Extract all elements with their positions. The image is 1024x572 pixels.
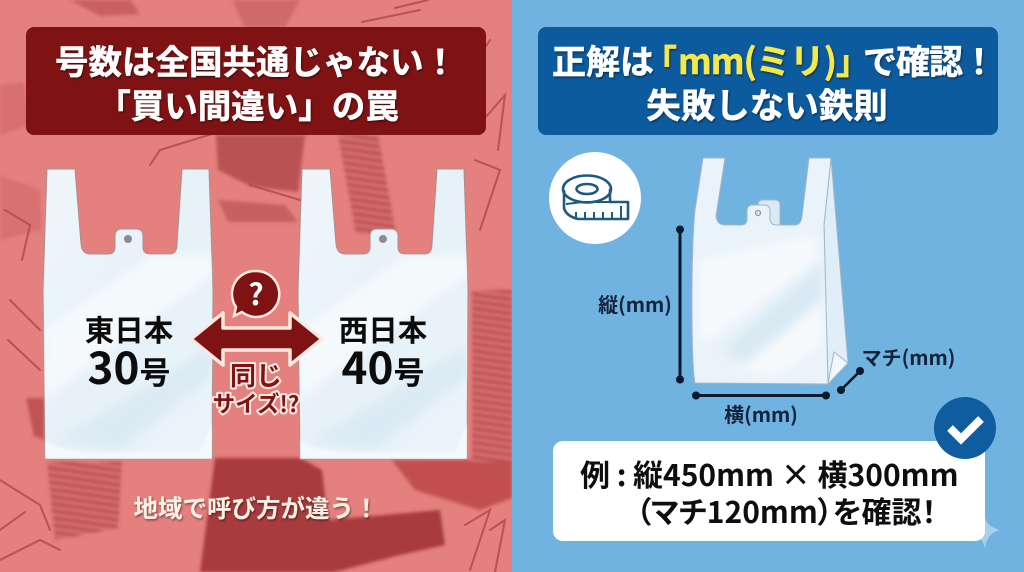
bag: east Japan 30 bbox=[43, 169, 213, 459]
bag: west Japan 40: 西日本 bbox=[339, 308, 428, 350]
diagram: bag with gusset bbox=[692, 158, 848, 384]
heading panel: right: 正解は bbox=[552, 35, 654, 84]
callout: example: 縦450mm × 横300mm bbox=[633, 451, 958, 495]
bag: west Japan 40: 40号 bbox=[342, 333, 424, 397]
label: same size?: 同じ bbox=[230, 356, 282, 393]
caption: regional naming: 地域で呼び方が違う！ bbox=[134, 490, 378, 525]
icon: question speech bubble bbox=[232, 270, 279, 317]
panel: left red background bbox=[0, 0, 512, 572]
panel: right blue background bbox=[512, 0, 1024, 572]
heading panel: left: 「買い間違い」の罠 bbox=[97, 79, 399, 128]
bag: east Japan 30: 30号 bbox=[88, 333, 170, 397]
arrow: two-way bbox=[191, 313, 322, 365]
bag: west Japan 40 bbox=[298, 169, 468, 459]
heading panel: right: 」 bbox=[836, 35, 870, 84]
measure: gusset: マチ(mm) bbox=[862, 342, 955, 371]
label: same size?: サイズ!? bbox=[213, 387, 299, 419]
heading panel: left: 号数は全国共通じゃない！ bbox=[55, 35, 457, 84]
measure: height bbox=[598, 226, 684, 384]
heading panel: right: mm(ミリ) bbox=[678, 34, 836, 85]
callout: example: （マチ120mm）を確認！ bbox=[636, 488, 937, 532]
heading panel: right bbox=[538, 27, 998, 135]
icon: check badge bbox=[934, 397, 996, 459]
callout: example bbox=[553, 441, 985, 541]
label: same size? bbox=[213, 356, 299, 419]
bag: east Japan 30: 東日本 bbox=[85, 308, 174, 350]
heading panel: right: で確認！ bbox=[863, 35, 995, 84]
icon: measuring tape bbox=[549, 152, 641, 244]
heading panel: right: 失敗しない鉄則 bbox=[646, 78, 888, 128]
measure: width bbox=[692, 392, 830, 428]
callout: example: 例 : bbox=[580, 451, 627, 495]
heading panel: right: 「 bbox=[643, 35, 677, 84]
measure: width: 横(mm) bbox=[724, 399, 798, 428]
icon: question speech bubble: ? bbox=[248, 270, 264, 314]
icon: sparkle bbox=[970, 517, 1000, 548]
measure: height: 縦(mm) bbox=[598, 289, 672, 318]
measure: gusset bbox=[837, 342, 955, 394]
heading panel: left bbox=[26, 27, 486, 135]
